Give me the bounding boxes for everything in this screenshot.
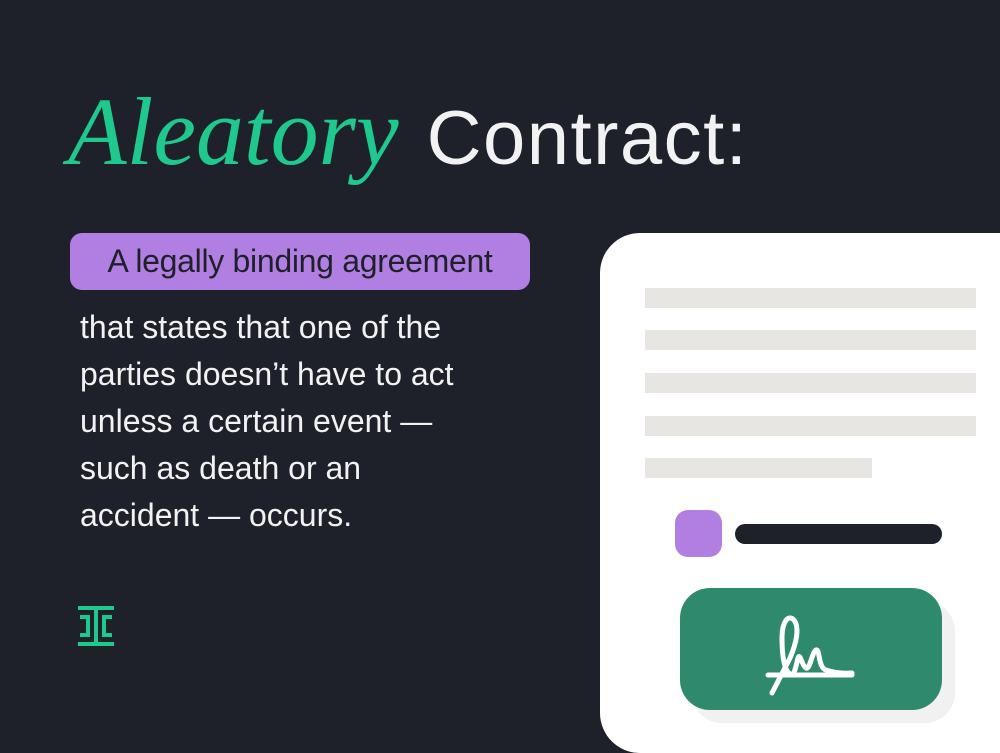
body text: accident — occurs.	[80, 497, 352, 533]
sign button	[680, 588, 942, 710]
title: Aleatory Contract:	[68, 78, 748, 185]
body text: such as death or an	[80, 450, 361, 486]
shadow	[692, 601, 955, 723]
body text: that states that one of the	[80, 309, 441, 345]
highlight pill: A legally binding agreement	[107, 243, 493, 279]
document card	[600, 233, 1000, 753]
body text	[80, 309, 454, 533]
logo icon	[78, 606, 114, 646]
icon: signature	[766, 616, 854, 696]
body text: unless a certain event —	[80, 403, 432, 439]
text lines	[645, 288, 976, 308]
purple checkbox	[675, 510, 722, 557]
highlight pill	[70, 233, 530, 290]
dark signature line	[735, 524, 942, 544]
body text: parties doesn’t have to act	[80, 356, 454, 392]
